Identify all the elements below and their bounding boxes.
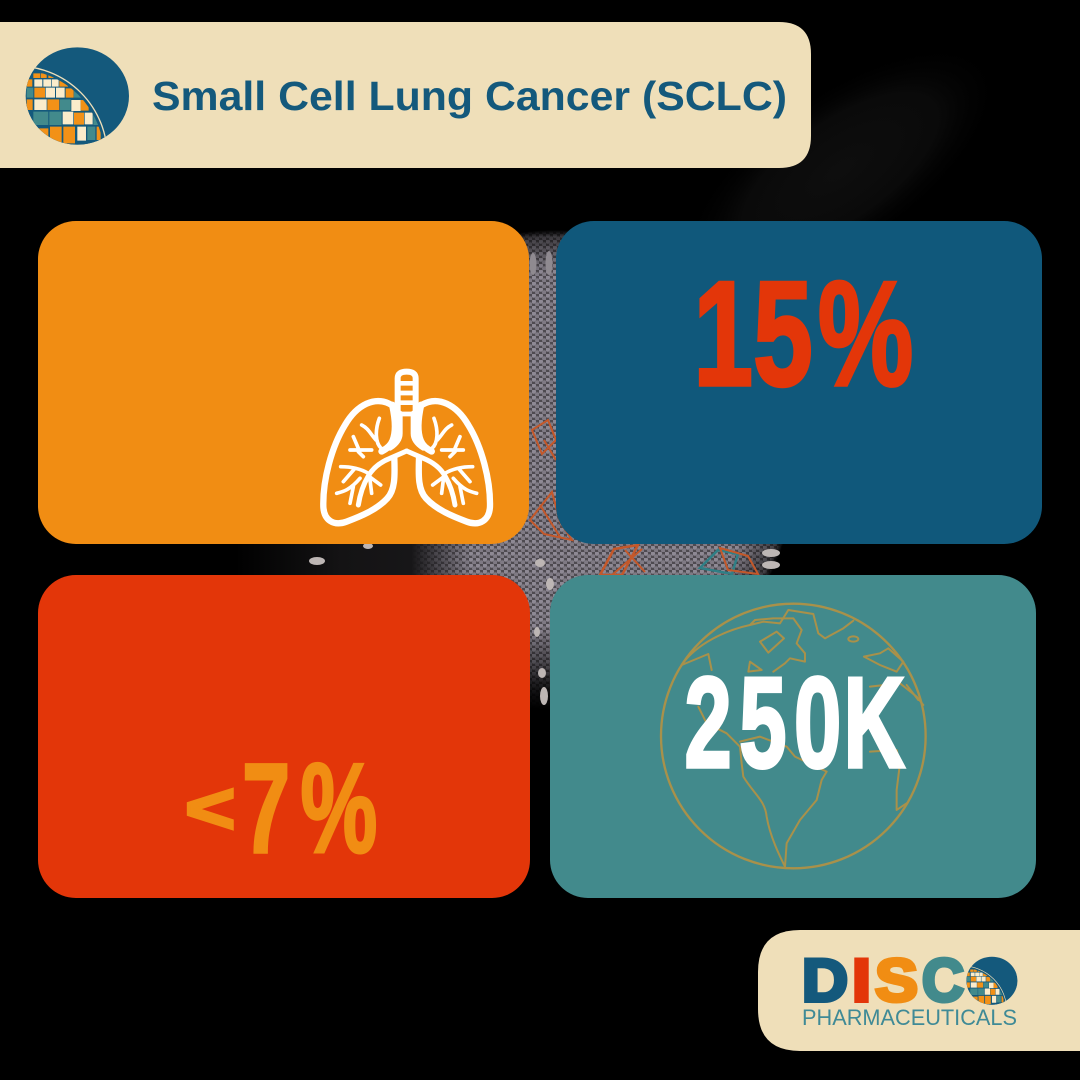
- faint background haze: [638, 0, 1042, 345]
- icon: globe logo: [0, 47, 129, 247]
- virus cell image: [278, 231, 782, 705]
- logo letter C: C: [922, 947, 964, 1014]
- stat: <7%: <: [185, 768, 235, 848]
- panel: lung icon card: [38, 221, 529, 544]
- lower shadow of the cell: [525, 625, 555, 720]
- icon: globe outline: [661, 604, 926, 868]
- company logo panel: [758, 930, 1080, 1055]
- stat: 15%: 15%: [693, 250, 913, 417]
- panel: 15% card: [556, 221, 1042, 544]
- logo globe as letter O: [917, 957, 1017, 1055]
- header banner: [0, 22, 811, 247]
- panel: <7% card: [38, 575, 530, 898]
- dim strip left of the cell: [235, 544, 341, 575]
- icon: lungs: [323, 372, 490, 523]
- virus surface spikes: [309, 251, 780, 705]
- logo letter S: S: [875, 947, 918, 1014]
- title: Small Cell Lung Cancer (SCLC): [152, 73, 787, 119]
- molecular structures: [530, 420, 758, 575]
- stat: 250K: 250K: [684, 651, 905, 795]
- panel: 250K card: [550, 575, 1036, 898]
- logo letter I: I: [852, 947, 871, 1014]
- stat: <7%: 7%: [242, 739, 377, 880]
- logo subtitle: PHARMACEUTICALS: [802, 1005, 1017, 1030]
- logo letter D: D: [802, 947, 848, 1014]
- dim left shoulder of the cell: [340, 544, 470, 575]
